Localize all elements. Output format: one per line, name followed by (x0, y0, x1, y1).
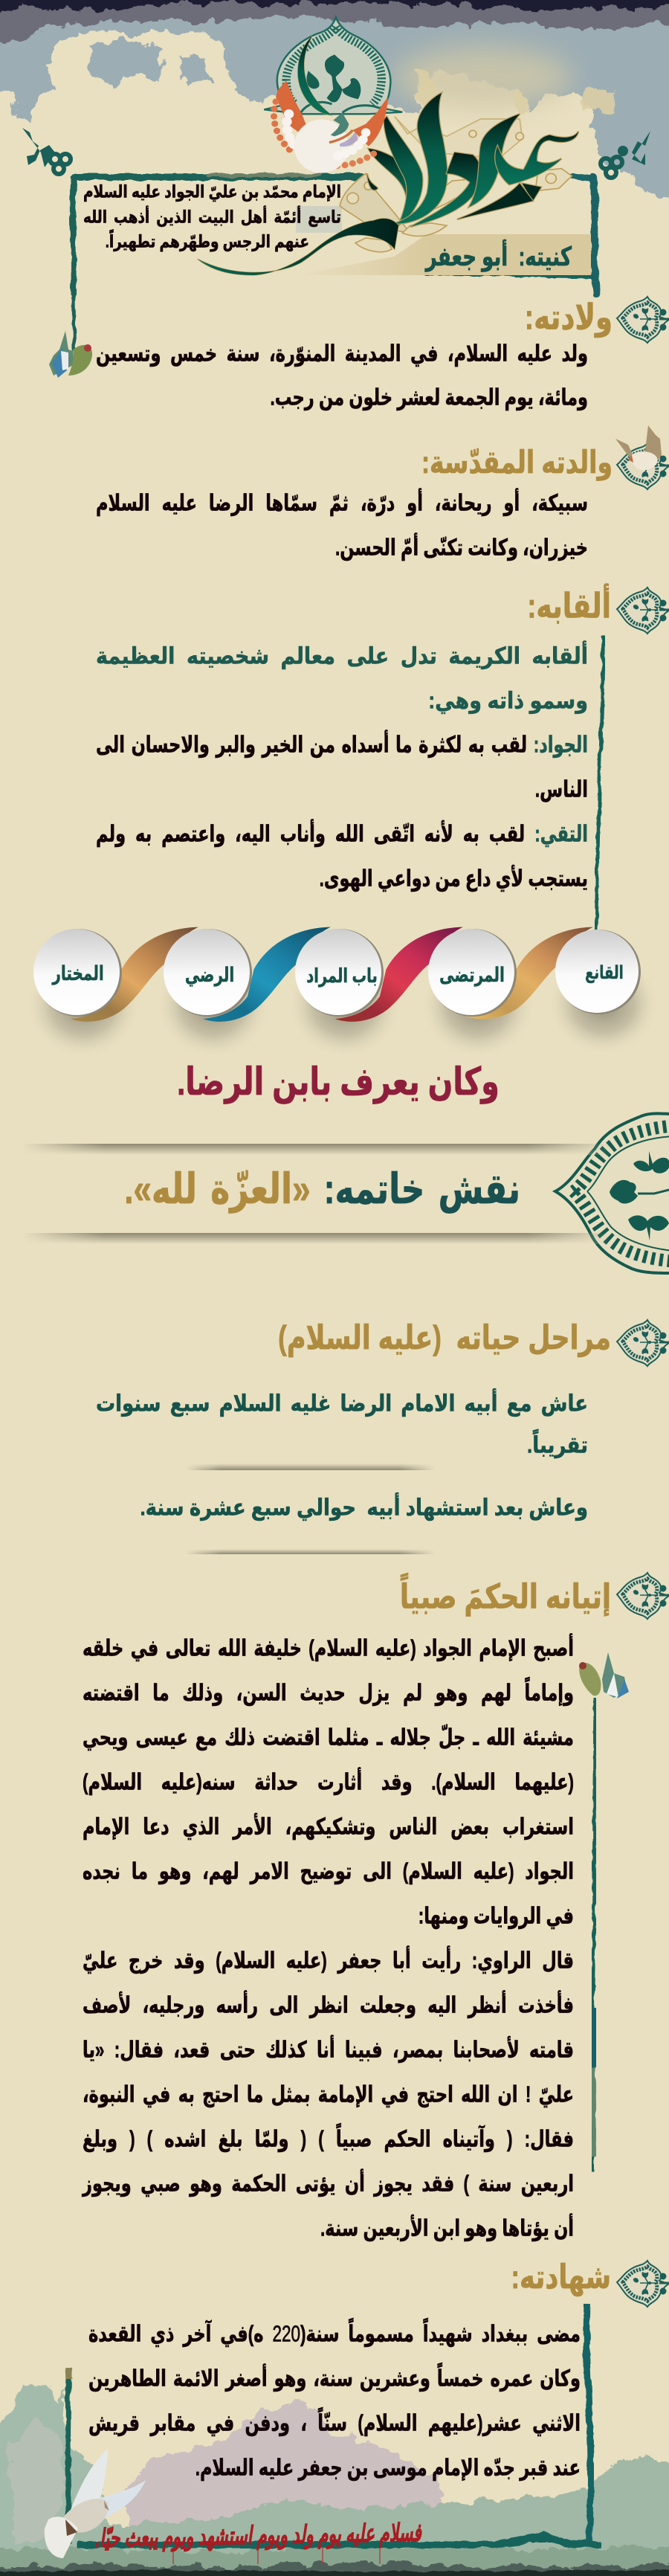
medallion discs (33, 929, 641, 1017)
icon: ornament life stages (617, 1320, 669, 1366)
callout: known as: وكان يعرف بابن الرضا. (177, 1060, 500, 1104)
label: medallion 2: المرتضى (439, 965, 505, 987)
icon: small bird left (49, 331, 92, 378)
heading: birth: ولادته: (525, 297, 613, 337)
text: martyrdom (88, 2317, 581, 2481)
dome ornament (264, 17, 402, 114)
text: birth (96, 341, 588, 410)
titles vertical rule (596, 636, 604, 930)
text: mother: خيزران، وكانت تكنّى أمّ الحسن. (335, 535, 588, 560)
divider bottom (22, 1233, 610, 1244)
closing red verse: فسلام عليه يوم ولد ويوم استشهد ويوم يبعث حيّا. (95, 2519, 421, 2552)
icon: ornament wisdom (617, 1573, 669, 1619)
dove (45, 2449, 146, 2558)
text: wisdom: (عليهما السلام). وقد أثارت حداثة سنه(عليه السلام) (83, 1769, 574, 1794)
text: wisdom: أن يؤتاها وهو ابن الأربعين سنة. (320, 2215, 574, 2241)
text: wisdom: في الروايات ومنها: (418, 1903, 574, 1928)
icon: dove over mother heading (615, 425, 662, 470)
intro text (83, 181, 341, 252)
icon: ornament mother (617, 443, 669, 489)
text: martyrdom: عند قبر جدّه الإمام موسى بن جعفر عليه السلام. (195, 2455, 581, 2480)
text: wisdom: الجواد (عليه السلام) الى توضيح الامر لهم، وهو ما نجده (83, 1858, 574, 1884)
text: martyrdom: وكان عمره خمساً وعشرين سنة، وهو أصغر الائمة الطاهرين (88, 2366, 581, 2391)
large ornament seal (555, 1113, 669, 1273)
text: titles (96, 640, 588, 892)
heading: martyrdom: شهادته: (511, 2258, 611, 2296)
green calligraphy strokes (198, 36, 578, 275)
divider small bottom (186, 1549, 435, 1554)
header frame (73, 176, 597, 350)
intro text: عنهم الرجس وطهّرهم تطهيراً. (106, 231, 309, 251)
text: wisdom: قامته لأصحابنا بمصر، فبينا أنا كذلك حتى قعد، فقال: «يا (83, 2037, 574, 2062)
text: wisdom: أصبح الإمام الجواد (عليه السلام) خليفة الله تعالى في خلقه (83, 1635, 574, 1661)
intro text: تاسع أئمّة أهل البيت الذين أذهب الله (83, 207, 341, 226)
header calligraphy emblem with dome and bird (198, 17, 578, 275)
text: martyrdom: مضى ببغداد شهيداً مسموماً سنة(220 ه)في آخر ذي القعدة (88, 2321, 581, 2346)
red drip lines (173, 2547, 380, 2564)
title medallions with ribbons (25, 927, 660, 1059)
gold arabesque backing (340, 117, 572, 252)
text: titles: ألقابه الكريمة تدل على معالم شخصيته العظيمة (96, 643, 588, 669)
text: wisdom: عليّ ! ان الله احتج في الإمامة بمثل ما احتج به في النبوة، (83, 2081, 574, 2107)
label: medallion 1: القانع (585, 962, 624, 983)
label: medallion 3: باب المراد (306, 965, 378, 988)
heading: wisdom: إتيانه الحكمَ صبياً (400, 1577, 611, 1616)
divider top (22, 1144, 610, 1155)
label: medallion 5: المختار (52, 963, 104, 985)
kunya label: كنيته: أبو جعفر (426, 242, 572, 271)
seal text: نقش خاتمه: «العزّة لله». (124, 1166, 520, 1213)
wisdom vertical rule (592, 1698, 595, 2171)
text: titles: الجواد: لقب به لكثرة ما أسداه من الخير والبر والاحسان الى (96, 732, 588, 757)
text: birth: ولد عليه السلام، في المدينة المنوّرة، سنة خمس وتسعين (96, 341, 588, 366)
ribbons (71, 927, 593, 1022)
text: wisdom: فأخذت أنظر اليه وجعلت انظر الى رأسه ورجليه، لأصف (83, 1992, 574, 2018)
icon: ornament births (617, 297, 669, 343)
text: martyrdom: الاثني عشر(عليهم السلام) سنّاً ، ودفن في مقابر قريش (88, 2410, 581, 2435)
text: stages second: وعاش بعد استشهاد أبيه حوالي سبع عشرة سنة. (140, 1494, 588, 1521)
text: mother (96, 488, 588, 561)
heading: stages: مراحل حياته (عليه السلام) (278, 1319, 611, 1356)
icon: ornament martyrdom (617, 2261, 669, 2307)
icon: small bird right (579, 1652, 629, 1698)
kunya box (297, 234, 591, 275)
text: wisdom: اربعين سنة ) فقد يجوز أن يؤتى الحكمة وهو صبي ويجوز (83, 2171, 574, 2196)
text: titles: الناس. (535, 776, 588, 802)
gray patch behind intro (296, 206, 342, 233)
text: titles: يستجب لأي داع من دواعي الهوى. (320, 866, 588, 891)
text: wisdom: فقال: ( وآتيناه الحكم صبياً ) ( ولمّا بلغ اشده ) ( وبلغ (83, 2126, 574, 2151)
heading: titles: ألقابه: (527, 586, 611, 625)
corner ornaments (22, 128, 650, 178)
martyrdom frame (68, 2304, 602, 2545)
header watercolor background (0, 0, 669, 201)
bird (274, 80, 388, 173)
medallion shadows (25, 952, 660, 1059)
text: titles: التقي: لقب به لأنه اتّقى الله وأناب اليه، واعتصم به ولم (96, 821, 588, 846)
icon: ornament titles (617, 587, 669, 634)
divider small top (189, 1464, 432, 1470)
text: stages first: عاش مع أبيه الامام الرضا غليه السلام سبع سنوات (96, 1390, 588, 1417)
heading: mother: والدته المقدّسة: (421, 445, 613, 480)
text: mother: سبيكة، أو ريحانة، أو درّة، ثمّ سمّاها الرضا عليه السلام (96, 490, 588, 515)
intro text: الإمام محمّد بن عليّ الجواد عليه السلام (83, 181, 341, 202)
text: wisdom: قال الراوي: رأيت أبا جعفر (عليه السلام) وقد خرج عليّ (83, 1948, 574, 1973)
text: stages first (96, 1388, 588, 1459)
label: medallion 4: الرضي (185, 965, 234, 987)
text: wisdom: استغراب بعض الناس وتشكيكهم، الأمر الذي دعا الإمام (83, 1814, 574, 1839)
text: wisdom: وإماماً لهم وهو لم يزل حديث السن، وذلك ما اقتضته (83, 1680, 574, 1705)
text: titles: وسمو ذاته وهي: (428, 688, 588, 713)
text: birth: ومائة، يوم الجمعة لعشر خلون من رجب. (270, 385, 588, 410)
text: stages first: تقريباً. (527, 1432, 588, 1458)
text: wisdom (82, 1633, 574, 2241)
bottom watercolor background (0, 2383, 669, 2576)
text: wisdom: مشيئة الله ـ جلّ جلاله ـ مثلما اقتضت ذلك مع عيسى ويحي (83, 1725, 574, 1750)
